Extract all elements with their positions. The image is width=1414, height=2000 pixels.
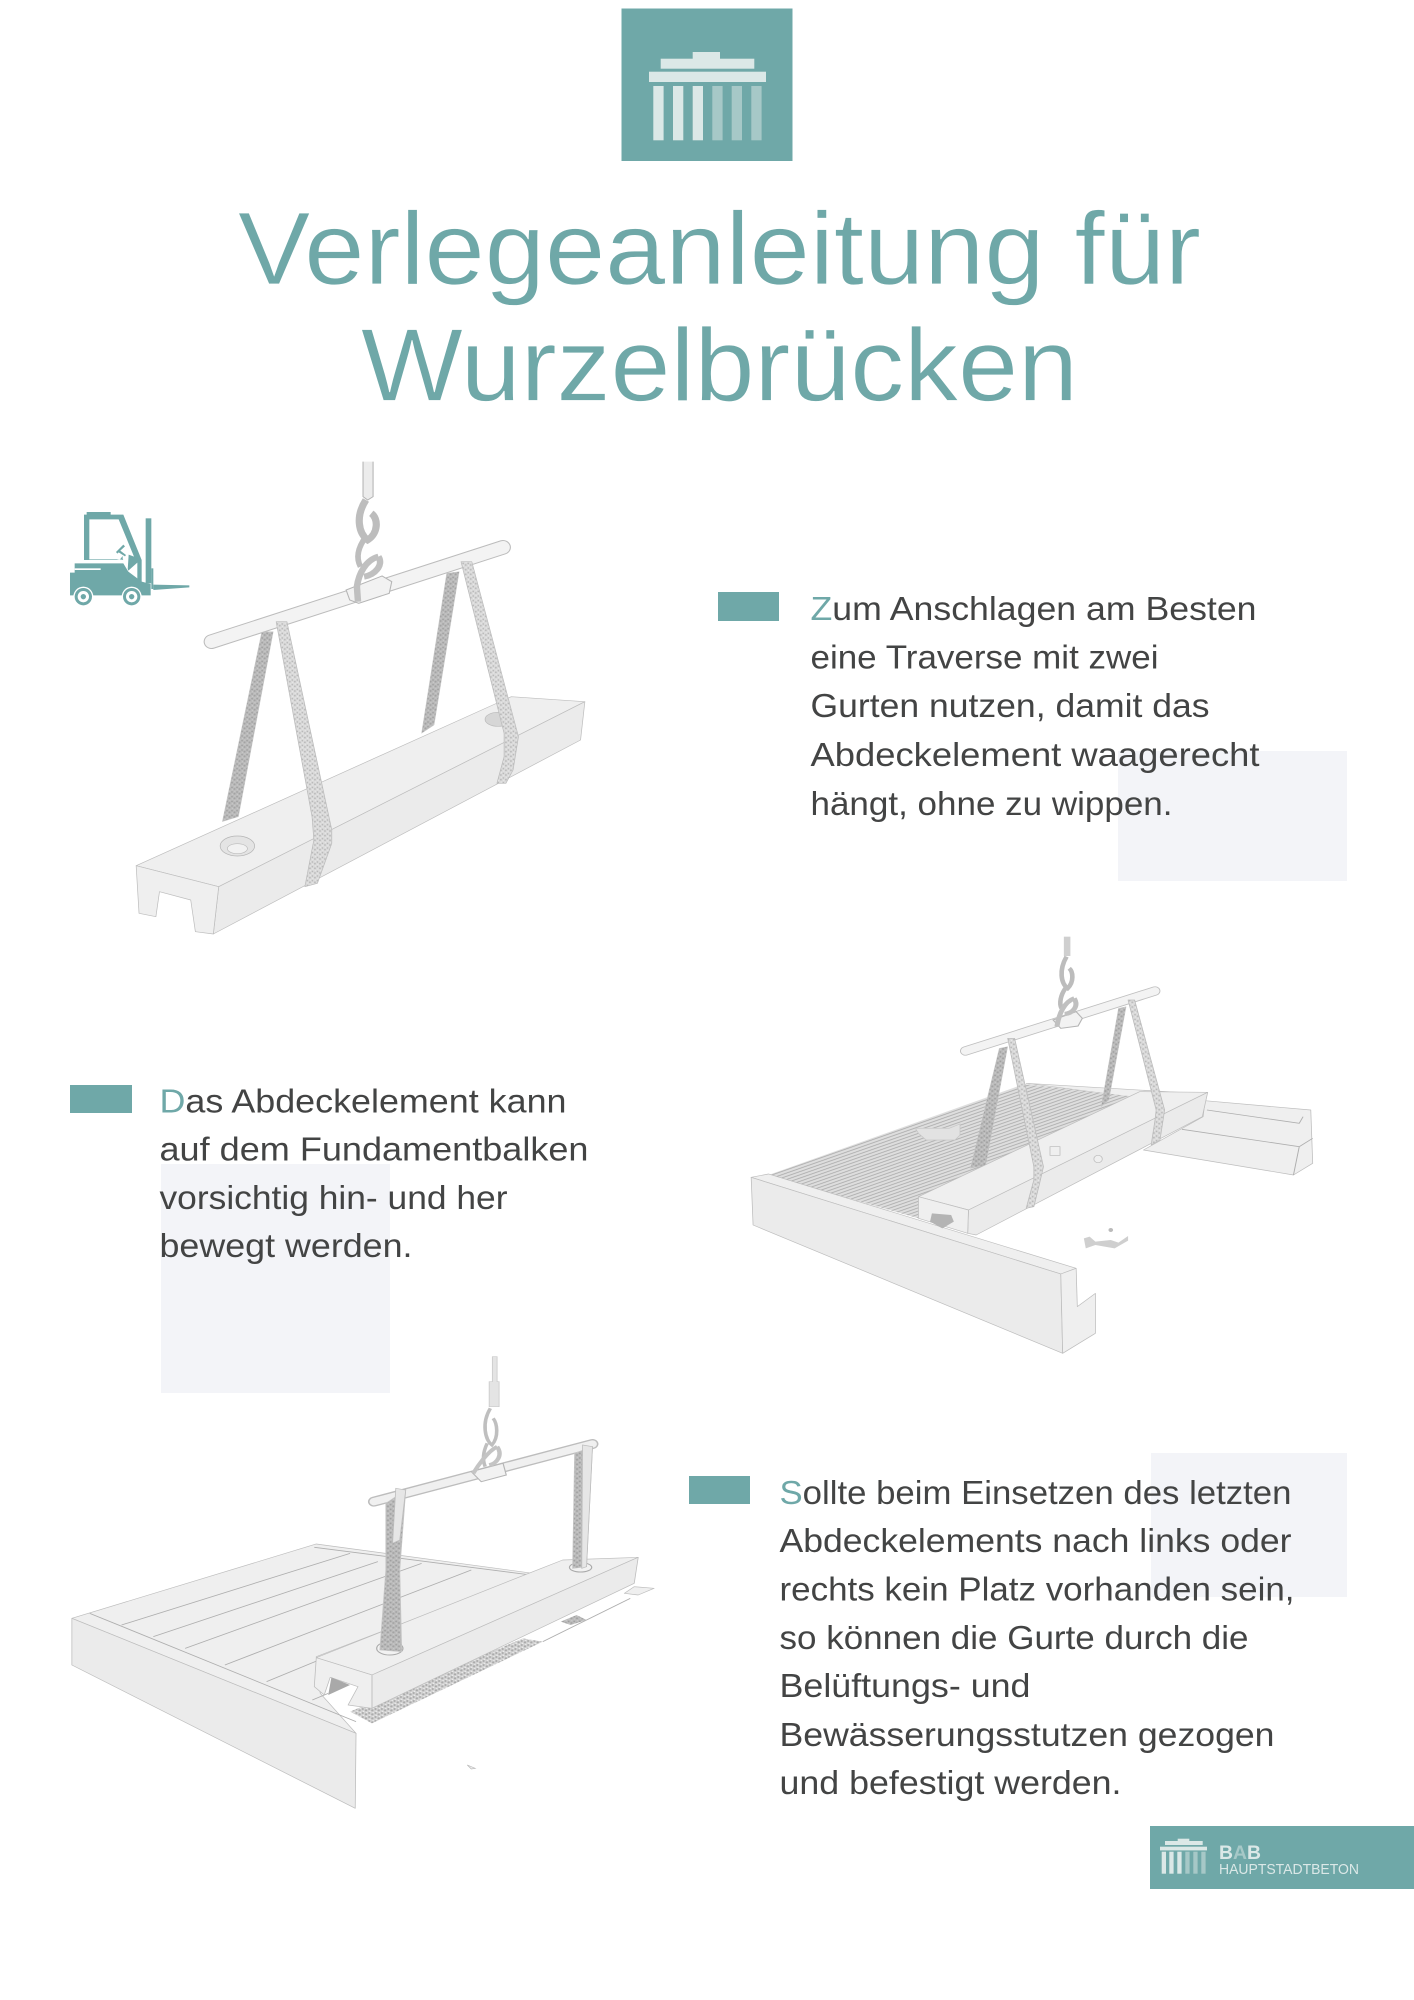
brand text: HAUPTSTADTBETON	[1219, 1861, 1359, 1878]
illustration: last element lowered with straps through the sockets	[72, 1357, 654, 1808]
icon: small gate	[1160, 1839, 1207, 1874]
paragraph: Abdeckelement waagerecht	[810, 736, 1260, 773]
paragraph: eine Traverse mit zwei	[810, 639, 1158, 676]
title: Wurzelbrücken	[361, 308, 1078, 422]
paragraph: Abdeckelements nach links oder	[780, 1522, 1292, 1559]
icon: forklift	[70, 512, 189, 607]
paragraph: Bewässerungsstutzen gezogen	[780, 1716, 1274, 1753]
title	[238, 191, 1201, 422]
paragraph	[810, 590, 1260, 822]
illustration: beam hanging from traverse	[136, 462, 585, 934]
background panel: top right	[1118, 751, 1347, 881]
paragraph: so können die Gurte durch die	[780, 1619, 1248, 1656]
text: step 3	[689, 1474, 1294, 1801]
paragraph: vorsichtig hin- und her	[160, 1179, 508, 1216]
marker	[689, 1476, 750, 1504]
paragraph	[780, 1474, 1294, 1801]
paragraph: rechts kein Platz vorhanden sein,	[780, 1571, 1294, 1608]
brand text	[1219, 1843, 1359, 1878]
illustration: placing cover element on foundation	[751, 937, 1313, 1353]
paragraph: bewegt werden.	[160, 1227, 412, 1264]
paragraph: Das Abdeckelement kann	[160, 1083, 566, 1120]
text: step 1	[718, 590, 1260, 822]
marker	[718, 592, 779, 621]
marker	[70, 1085, 132, 1113]
paragraph	[160, 1083, 588, 1264]
paragraph: Belüftungs- und	[780, 1667, 1030, 1704]
background panel: bottom right	[1151, 1453, 1347, 1597]
paragraph: Zum Anschlagen am Besten	[810, 590, 1256, 627]
paragraph: auf dem Fundamentbalken	[160, 1131, 588, 1168]
title: Verlegeanleitung für	[238, 191, 1201, 306]
text: step 2	[70, 1083, 588, 1264]
paragraph: Gurten nutzen, damit das	[810, 687, 1210, 724]
brand text: BAB	[1219, 1843, 1261, 1864]
background panel: middle left	[161, 1164, 390, 1393]
paragraph: und befestigt werden.	[780, 1764, 1122, 1801]
header logo: Brandenburg Gate icon	[622, 8, 792, 161]
paragraph: Sollte beim Einsetzen des letzten	[780, 1474, 1292, 1511]
footer logo bar	[1150, 1826, 1414, 1889]
paragraph: hängt, ohne zu wippen.	[810, 785, 1172, 822]
